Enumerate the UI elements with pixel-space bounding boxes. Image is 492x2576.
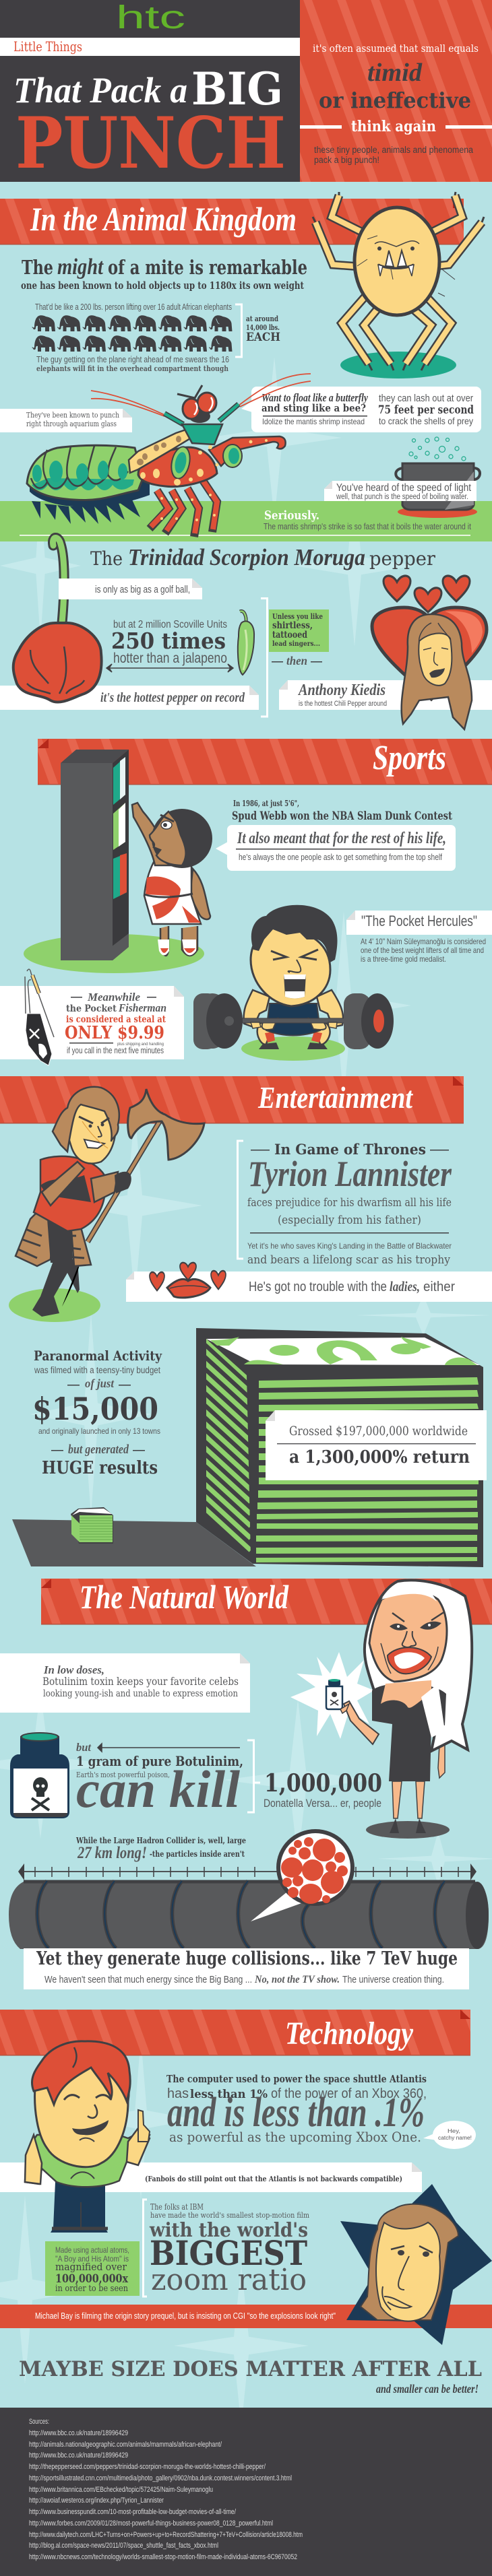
icon: mite [313,192,484,378]
text: 250 times hotter: 250 times [111,628,226,654]
text: ibm zoom ratio: BIGGEST [150,2233,307,2273]
callout: trouble with the ladies: He's got no trouble with the [249,1280,387,1294]
callout: 7 TeV collisions: No, not the TV show. [254,1974,340,1985]
footer: sources: http://www.bbc.co.uk/nature/18996429 [29,2451,128,2459]
header: intro panel: or ineffective [319,88,471,113]
header: intro panel: timid [367,59,423,87]
header: title panel [0,0,300,185]
footer: sources: http://www.dailytech.com/LHC+Turns+on+Powers+up+to+RecordShattering+7+TeV+Collision/article18008.htm [29,2531,303,2539]
callout: mantis shrimp speech bubble: to crack the shells of prey [379,416,473,426]
callout: botulinim low doses [0,1653,250,1713]
callout: botulinim low doses: looking young-ish and unable to express emotion [43,1688,238,1699]
text: overhead compartment: elephants will fit in the overhead compartment though [36,364,229,373]
text: space shuttle atlantis: The computer used to power the space shuttle Atlantis [166,2073,427,2085]
text: game of thrones: Yet it's he who saves King's Landing in the Battle of Blackwater [247,1241,452,1251]
bracket and each-weight label [235,304,280,357]
panel: lead singers: shirtless, [272,620,313,631]
panel: a boy and his atom: 100,000,000x [55,2272,129,2286]
callout: hey catchy name [423,2121,476,2149]
text: ibm zoom ratio: have made the world's smallest stop-motion film [150,2210,309,2220]
text: can kill: Earth's most powerful poison, [76,1771,170,1779]
text: space shuttle atlantis: as powerful as the upcoming Xbox One. [169,2129,421,2145]
text: naim suleymanoglu [361,937,486,964]
callout: 1,300,000% return: a 1,300,000% return [289,1447,470,1467]
text: million people: 1,000,000 [264,1769,382,1797]
footer: sources: http://blog.al.com/space-news/2011/07/space_shuttle_fast_facts_xbox.html [29,2542,218,2550]
text: game of thrones: and bears a lifelong scar as his trophy [247,1253,450,1267]
panel: a boy and his atom: in order to be seen [55,2284,129,2294]
text: paranormal activity: Paranormal Activity [34,1348,162,1364]
callout: pocket fisherman: plus shipping and handling [117,1043,164,1047]
footer: sources: http://sportsillustrated.cnn.com/multimedia/photo_gallery/0902/nba.dunk.contest.winners/content.3.html [29,2474,292,2482]
callout: top shelf speech bubble [216,825,456,871]
logo: htc: htc [116,0,185,36]
floor shadow under money [12,1519,256,1566]
callout: mantis shrimp speech bubble [241,387,481,432]
callout: speed of light: well, that punch is the speed of boiling water. [336,493,468,501]
panel: a boy and his atom: "A Boy and His Atom" is [55,2254,129,2264]
footer: sources: http://awoiaf.westeros.org/index.php/Tyrion_Lannister [29,2497,164,2505]
text: paranormal activity: of just [85,1377,115,1390]
panel: lead singers: lead singers... [272,640,320,648]
callout: anthony kiedis: Anthony Kiedis [297,682,386,699]
icon: pocket fisherman rod [25,969,54,1065]
text: can kill: 1 gram of pure Botulinim, [76,1753,243,1769]
ribbon: the natural world: The Natural World [80,1578,289,1616]
title script: That Pack a [13,70,187,110]
text: space shuttle atlantis: of the power of an Xbox 360, [271,2086,427,2101]
callout: aquarium glass note: right through aquarium glass [26,419,117,428]
ribbon: technology: Technology [285,2016,414,2051]
band: seriously [0,501,492,541]
callout: the pocket hercules [346,911,492,935]
callout: golf ball [59,579,202,599]
icon: scorpion pepper [13,623,102,702]
text: space shuttle atlantis: has [167,2086,189,2101]
callout: golf ball: is only as big as a golf ball, [95,584,190,595]
text: paranormal activity: but generated [68,1443,129,1457]
callout: trouble with the ladies: ladies, [390,1278,420,1294]
callout: speed of light [324,481,476,501]
title BIG: BIG [191,63,283,115]
strip: little things: Little Things [13,38,82,55]
text: 250 times hotter: hotter than a jalapeno [113,651,227,666]
ribbon: the natural world [41,1578,492,1624]
icon: pepper stem [53,537,64,623]
text: game of thrones: (especially from his father) [278,1214,421,1227]
text: 250 times hotter [106,619,233,672]
callout: aquarium glass note: They've been known to punch [26,410,119,420]
text: ibm zoom ratio [149,2202,309,2297]
ribbon: sports: Sports [373,739,446,777]
panel: a boy and his atom: magnified over [55,2261,127,2273]
bracket: ibm film [143,2200,147,2297]
text: large hadron collider: 27 km long! [77,1844,147,1862]
callout: hey catchy name: Hey, [448,2127,460,2134]
icon: lips and hearts [150,1263,226,1298]
header: intro panel [300,0,492,182]
text: then: then [286,654,307,667]
text: paranormal activity [32,1348,162,1478]
callout: pocket fisherman: is considered a steal at [66,1014,166,1025]
bracket: kill count [247,1740,260,1812]
arrow: points to bottle [98,1744,240,1752]
heading: trinidad scorpion moruga: The [90,548,123,570]
heading: trinidad scorpion moruga: pepper [369,548,436,570]
callout: pocket fisherman: Fisherman [118,1001,166,1014]
text: space shuttle atlantis: less than 1% [190,2088,268,2101]
text: million people [264,1769,382,1810]
icon: weightlifter [193,905,394,1061]
panel: lead singers: tattooed [272,630,307,640]
callout: particle magnifier bubble [251,1829,355,1921]
bracket and each-weight label: at around [246,315,278,323]
callout: pocket fisherman: the Pocket [66,1003,117,1014]
callout: mantis shrimp speech bubble: Want to float like a butterfly [262,391,368,404]
callout: aquarium glass note [0,409,132,432]
bracket: pepper to singer [261,598,267,717]
heading: trinidad scorpion moruga: Trinidad Scorpion Moruga [128,544,365,570]
text: large hadron collider: While the Large Hadron Collider is, well, large [75,1835,246,1845]
text: spud webb [232,799,452,822]
header: intro panel: it's often assumed that small equals [313,42,479,55]
text: game of thrones: faces prejudice for his dwarfism all his life [247,1196,452,1210]
panel: lead singers: Unless you like [272,612,323,621]
icon: man pointing finger [25,2041,150,2233]
callout: anthony kiedis: is the hottest Chili Pepper around [299,700,387,708]
panel: a boy and his atom [45,2241,140,2296]
icon: jalapeno [238,611,254,675]
heading: might of a mite: of a mite is remarkable [108,256,307,279]
callout: mantis shrimp speech bubble: and sting like a bee? [262,402,366,414]
text: spud webb: In 1986, at just 5'6", [233,799,299,808]
callout: pocket fisherman [0,986,184,1059]
footer: sources: http://www.britannica.com/EBchecked/topic/572425/Naim-Suleymanoglu [29,2486,213,2494]
chart: sixteen elephants pictogram [32,315,233,352]
footer: sources: http://animals.nationalgeographic.com/animals/mammals/african-elephant/ [29,2441,222,2449]
bracket and each-weight label: EACH [246,331,280,344]
icon: mantis shrimp [27,374,311,537]
band: michael bay [0,2305,492,2328]
callout: botulinim low doses: Botulinim toxin keeps your favorite celebs [42,1675,239,1688]
text: game of thrones [237,1141,452,1267]
text: elephants comparison: That'd be like a 200 lbs. person lifting over 16 adult African elephants [35,302,232,312]
panel: lead singers [269,609,329,652]
callout: pocket fisherman: if you call in the next five minutes [67,1046,164,1055]
callout: anthony kiedis [279,680,492,710]
title PUNCH: PUNCH [16,101,286,185]
text: large hadron collider [75,1835,246,1862]
text: large hadron collider: -the particles inside aren't [150,1849,245,1859]
footer: sources: http://thepepperseed.com/peppers/trinidad-scorpion-moruga-the-worlds-hottest-chilli-pepper/ [29,2463,266,2471]
arrow: double headed [106,664,233,672]
footer: sources: http://www.bbc.co.uk/nature/18996429 [29,2429,128,2437]
icon: pepper stem colour [53,537,64,623]
heading: might of a mite: The [22,256,53,279]
heading: might of a mite: one has been known to hold objects up to 1180x its own weight [21,280,304,292]
text: paranormal activity: and originally launched in only 13 towns [38,1426,160,1436]
text: 250 times hotter: but at 2 million Scoville Units [113,619,227,630]
text: paranormal activity: was filmed with a teensy-tiny budget [34,1365,160,1375]
footer: sources [0,2408,492,2576]
heading: might of a mite [21,255,307,292]
text: space shuttle atlantis [166,2073,427,2145]
text: paranormal activity: $15,000 [32,1391,158,1427]
footer: sources: http://www.forbes.com/2009/01/28/most-powerful-things-business-power08_0128_powerful.html [29,2519,273,2528]
strip: little things [0,38,300,56]
text: can kill: but [76,1741,92,1754]
ribbon: entertainment [0,1076,464,1123]
ribbon: entertainment: Entertainment [257,1080,413,1115]
header: intro panel: pack a big punch! [314,155,379,165]
heading: maybe size does matter: MAYBE SIZE DOES MATTER AFTER ALL [19,2357,482,2381]
icon: big money stack [196,1328,483,1567]
text: ibm zoom ratio: The folks at IBM [150,2202,204,2212]
callout: hottest pepper on record: it's the hottest pepper on record [100,690,245,705]
text: ibm zoom ratio: zoom ratio [151,2263,307,2297]
ribbon: in the animal kingdom: In the Animal Kingdom [30,200,297,238]
icon: bookshelf and spud webb [24,750,212,973]
text: ibm zoom ratio: with the world's [149,2218,308,2241]
icon: collider pipe [9,1881,489,1949]
callout: 7 TeV collisions [24,1948,469,1989]
footer: sources: Sources: [29,2418,49,2426]
callout: 1,300,000% return [266,1410,487,1480]
text: million people: Donatella Versa... er, people [264,1797,381,1810]
callout: pocket fisherman: ONLY $9.99 [65,1023,164,1043]
ribbon: technology [0,2010,470,2055]
callout: speed of light: You've heard of the speed of light [336,482,471,494]
callout: 7 TeV collisions: The universe creation thing. [342,1975,444,1985]
callout: trouble with the ladies [126,1272,492,1302]
callout: mantis shrimp speech bubble: Idolize the mantis shrimp instead [262,417,365,426]
footer: sources: http://www.nbcnews.com/technology/worlds-smallest-stop-motion-film-made-individual-atoms-6C9670052 [29,2553,297,2561]
callout: pocket fisherman: Meanwhile [87,991,140,1003]
text: naim suleymanoglu: is a three-time gold medalist. [361,954,446,964]
panel: a boy and his atom: Made using actual atoms, [55,2245,129,2255]
callout: botulinim low doses: In low doses, [43,1663,104,1676]
ruler [18,1863,476,1880]
text: overhead compartment: The guy getting on the plane right ahead of me swears the 16 [36,355,229,364]
text: then [272,654,322,667]
header: intro panel: these tiny people, animals and phenomena [314,145,473,155]
icon: tyrion lannister with axe [9,1087,204,1322]
callout: hey catchy name: catchy name! [438,2134,472,2141]
icon: large poison bottle [10,1732,69,1818]
ribbon: in the animal kingdom [0,199,464,245]
bracket and each-weight label: 14,000 lbs. [246,323,280,332]
ribbon: sports [38,739,492,785]
text: paranormal activity: HUGE results [42,1458,158,1478]
callout: trouble with the ladies: either [423,1280,455,1294]
icon: donatella versace with bottle [290,1580,472,1839]
icon: anthony kiedis in heart [372,576,487,729]
icon: boiling pot [396,437,480,518]
callout: fanbois [0,2162,422,2192]
header: intro panel: think again [351,118,436,135]
band: michael bay: Michael Bay is filming the origin story prequel, but is insisting on CGI "so the explosions look right" [35,2311,336,2321]
icon: star portrait [340,2184,492,2345]
callout: mantis shrimp speech bubble: they can lash out at over [379,393,473,404]
callout: hottest pepper on record [0,686,259,710]
callout: fanbois: (Fanbois do still point out that the Atlantis is not backwards compatible) [145,2174,402,2183]
text: overhead compartment [36,355,229,373]
icon: small money stack [71,1507,113,1544]
text: can kill: can kill [76,1760,240,1818]
footer: sources: http://www.businesspundit.com/10-most-profitable-low-budget-movies-of-all-time/ [29,2508,237,2516]
callout: 7 TeV collisions: We haven't seen that much energy since the Big Bang ... [44,1975,252,1985]
callout: top shelf speech bubble: he's always the one people ask to get something from the top shelf [239,853,442,862]
text: game of thrones: In Game of Thrones [274,1141,426,1158]
heading: might of a mite: might [57,255,104,279]
band: seriously: Seriously. [264,508,319,523]
